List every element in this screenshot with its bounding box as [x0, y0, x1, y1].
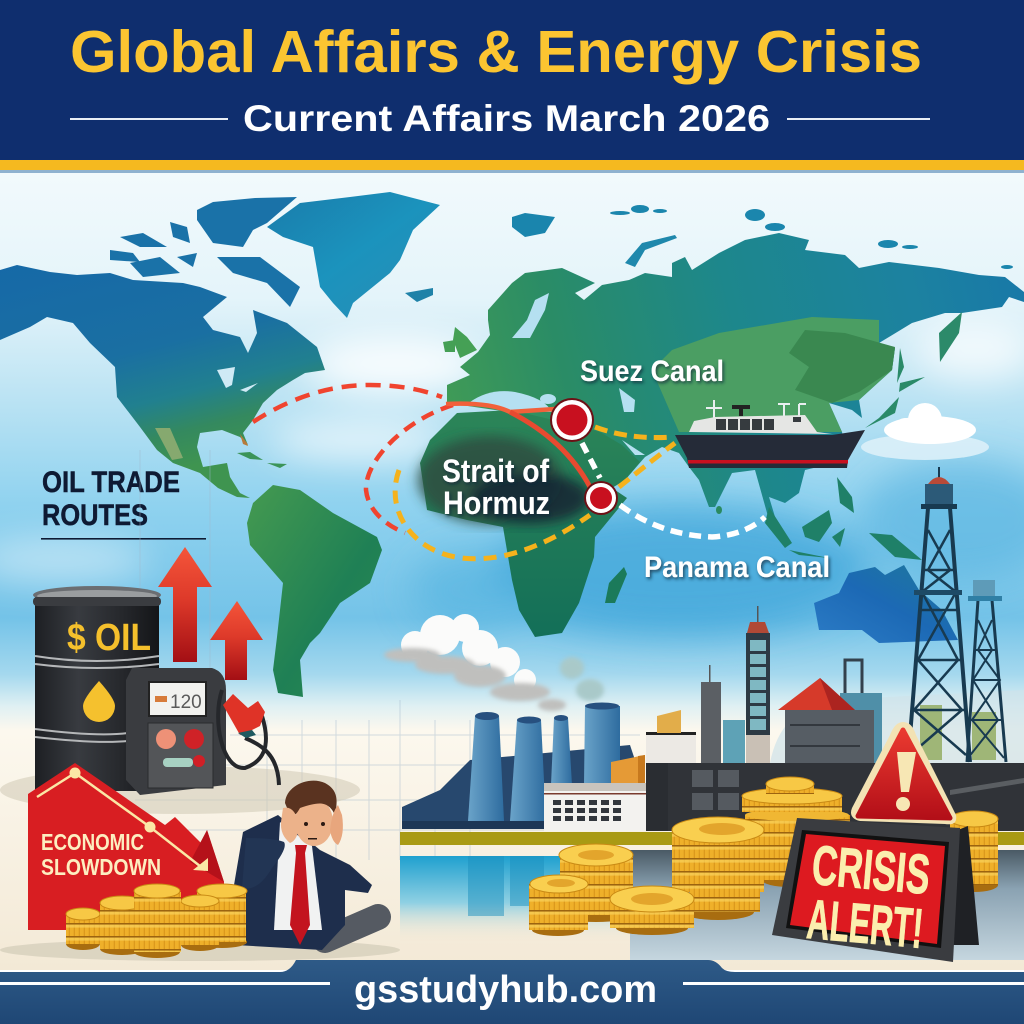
- UK and Ireland: [443, 327, 477, 358]
- Australia: [814, 565, 958, 643]
- small Arctic islands: [610, 205, 1013, 269]
- label: oil trade routes: OIL TRADE: [42, 466, 180, 499]
- Sri Lanka: [716, 506, 722, 514]
- teal building: [723, 720, 745, 765]
- ground shadow: [0, 766, 360, 814]
- marker: Hormuz: [584, 481, 618, 515]
- red route: [253, 385, 590, 533]
- marker: Suez: [550, 398, 594, 442]
- tower with windows: [746, 606, 770, 763]
- Greenland: [267, 192, 440, 318]
- sign text: [805, 833, 933, 960]
- cloud right: [861, 403, 989, 460]
- oil trade routes: [253, 385, 765, 559]
- website: gsstudyhub.com: [354, 969, 657, 1011]
- Kamchatka: [939, 312, 962, 362]
- Nova Zemlya: [625, 235, 677, 267]
- sign text: ALERT!: [805, 887, 926, 960]
- North America: [0, 265, 325, 498]
- white factory: [544, 783, 646, 831]
- Africa and Arabia: [420, 410, 640, 637]
- back teal building: [840, 660, 882, 763]
- dark factory block: [646, 763, 1024, 831]
- tie: [290, 845, 310, 945]
- arm: [242, 838, 285, 889]
- China light green: [652, 317, 895, 432]
- small derrick: [967, 580, 1006, 762]
- sign text: CRISIS: [810, 833, 933, 906]
- label: Panama Canal: Panama Canal: [644, 551, 830, 584]
- map background: [0, 170, 1024, 970]
- grey red roof building: [778, 678, 874, 763]
- chart label: ECONOMIC: [41, 829, 144, 855]
- Southeast Asia islands: [765, 477, 922, 560]
- label: Suez Canal: Suez Canal: [580, 355, 724, 388]
- warning triangle: [851, 722, 956, 824]
- economic slowdown chart: [28, 763, 224, 930]
- coins centre: [529, 777, 998, 936]
- oil derricks: [908, 467, 1006, 762]
- jacket: [234, 815, 372, 950]
- derrick background foliage: [920, 705, 996, 760]
- perspective grid: [135, 450, 640, 860]
- head: [295, 798, 333, 846]
- dock strip: [402, 821, 544, 829]
- orange box: [611, 755, 645, 783]
- label: oil trade routes: ROUTES: [42, 499, 148, 532]
- fuel nozzle: [223, 694, 265, 735]
- South America: [247, 485, 382, 697]
- hands: [281, 808, 299, 843]
- hose: [218, 690, 279, 785]
- Svalbard: [512, 213, 555, 237]
- decorative sea tones: [0, 320, 1024, 635]
- Baltic and inland seas: [470, 293, 645, 455]
- pump price: 120: [170, 692, 202, 713]
- yellow route: [395, 427, 675, 559]
- title: Global Affairs & Energy Crisis: [70, 19, 922, 85]
- chart label: SLOWDOWN: [41, 854, 161, 880]
- Madagascar: [605, 567, 627, 603]
- tan box: [657, 710, 681, 733]
- Caribbean islands: [237, 452, 287, 468]
- Florida tip: [240, 434, 248, 446]
- label: oil trade routes: [41, 466, 206, 540]
- shirt: [274, 822, 322, 930]
- water reflection: [400, 850, 1024, 960]
- white box building: [646, 732, 696, 765]
- white route: [582, 443, 765, 537]
- footer band: [0, 960, 1024, 1024]
- world map: [0, 192, 1024, 697]
- crisis alert sign: [772, 818, 979, 962]
- rising price arrows: [158, 547, 263, 680]
- header band: [0, 0, 1024, 173]
- Eurasia: [447, 233, 1024, 540]
- Great Lakes: [217, 367, 258, 392]
- industrial skyline: [400, 606, 1024, 845]
- Strait of Hormuz dark patch: [418, 436, 590, 524]
- coin shadow: [0, 939, 400, 961]
- coins left: [66, 884, 247, 958]
- ship: [675, 400, 865, 468]
- Iceland: [405, 288, 433, 302]
- pale hills: [770, 690, 1024, 763]
- grey skyscraper: [701, 665, 721, 763]
- Japan: [865, 348, 925, 428]
- label: Strait of Hormuz: Strait of: [442, 453, 549, 489]
- Arctic islands: [110, 197, 300, 307]
- East Asia dark green: [789, 330, 895, 403]
- cooling towers: [468, 706, 620, 821]
- barrel label: $ OIL: [67, 617, 151, 659]
- olive band: [400, 832, 1024, 845]
- oil barrel: [33, 586, 161, 791]
- leg: [325, 917, 378, 940]
- subtitle: Current Affairs March 2026: [243, 98, 770, 139]
- worried businessman: [234, 781, 378, 950]
- tower caps: [475, 702, 619, 724]
- fuel pump: [126, 668, 279, 795]
- label: Strait of Hormuz: Hormuz: [443, 485, 550, 521]
- big derrick: [908, 467, 970, 762]
- navy hill: [402, 745, 650, 825]
- Mexico highlight: [155, 428, 183, 460]
- smoke clouds: [384, 614, 604, 711]
- icon: oil drop: [83, 681, 115, 722]
